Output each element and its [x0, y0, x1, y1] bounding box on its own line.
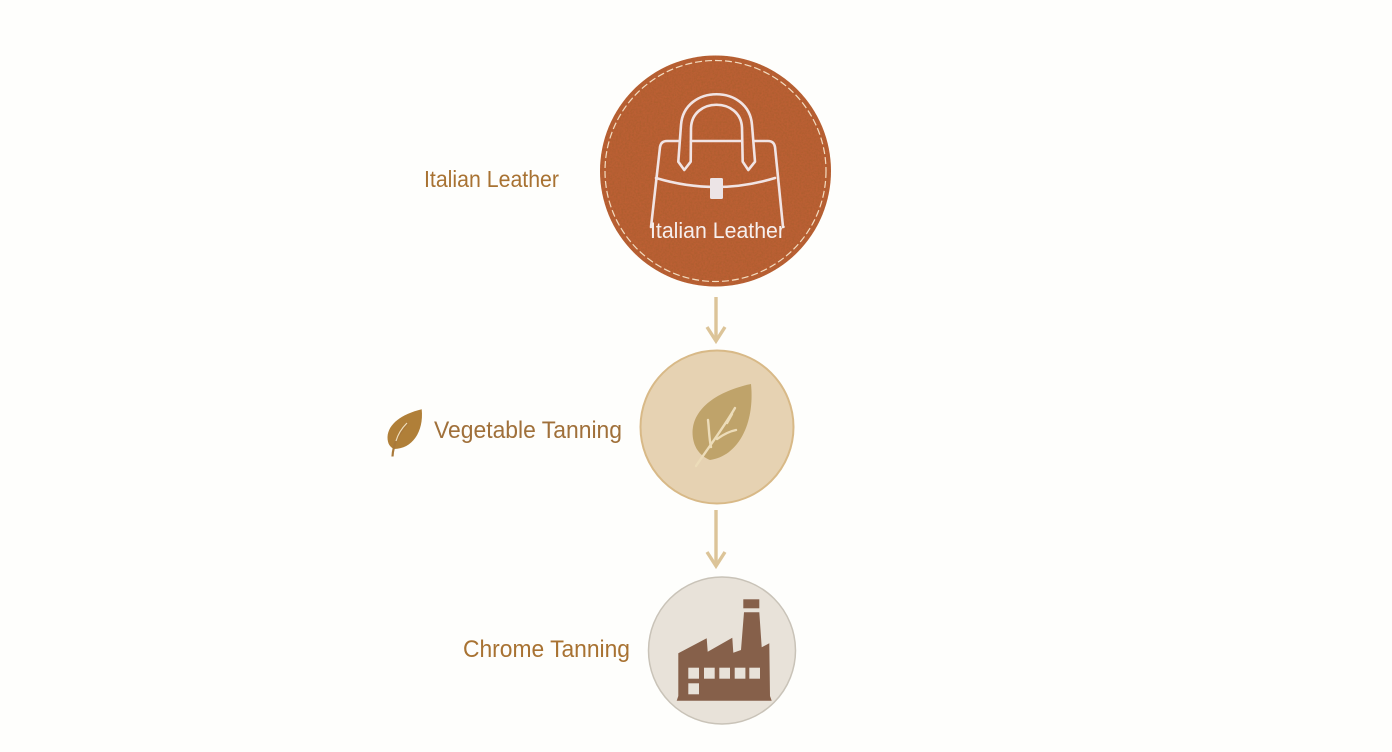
badge: Chrome Tanning [648, 577, 796, 724]
icon: factory [677, 599, 772, 701]
badge: Vegetable Tanning [640, 350, 794, 504]
label: Chrome Tanning: Chrome Tanning [463, 636, 630, 663]
icon: small leaf [388, 409, 422, 456]
badge title: Italian Leather [650, 218, 785, 243]
arrow 1 [707, 297, 725, 341]
label: Italian Leather: Italian Leather [424, 166, 559, 192]
icon: handbag [651, 94, 783, 227]
badge: Italian Leather [600, 56, 831, 286]
label: Vegetable Tanning: Vegetable Tanning [434, 417, 622, 444]
icon: leaf [692, 384, 752, 460]
leaf veins [696, 408, 736, 466]
leather circle [600, 56, 831, 286]
arrow 2 [707, 510, 725, 566]
stitching [605, 60, 826, 282]
circle [648, 577, 796, 724]
icon: clasp [710, 178, 723, 199]
circle [640, 350, 794, 504]
